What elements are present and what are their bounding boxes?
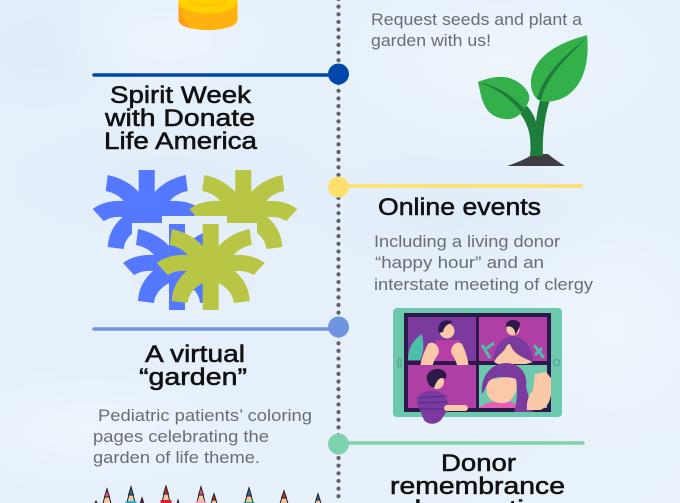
- video tile: top right: [479, 317, 547, 364]
- timeline marker: mint: [328, 434, 583, 454]
- text: virtual garden description: pages celebrating the: [93, 428, 269, 446]
- illustration: video call on tablet: [393, 308, 562, 424]
- icon: four palm shapes: [93, 170, 297, 310]
- timeline marker: periwinkle: [94, 316, 349, 338]
- text: virtual garden description: garden of life theme.: [93, 449, 260, 467]
- heading: Spirit Week with Donate Life America: Spirit Week: [110, 82, 252, 109]
- heading: Donor remembrance observation: [390, 450, 565, 503]
- heading: Online events: Online events: [378, 194, 541, 221]
- text: online events description: [374, 233, 594, 294]
- video tile: bottom right: [479, 363, 551, 412]
- heading: A virtual garden: “garden”: [139, 364, 247, 391]
- text: online events description: “happy hour” and an: [375, 254, 544, 272]
- heading: Donor remembrance observation: Donor: [441, 450, 516, 477]
- icon: gold coin stack: [178, 0, 238, 30]
- text: virtual garden description: Pediatric patients’ coloring: [98, 407, 312, 425]
- text: seed request: [371, 11, 583, 50]
- heading: Donor remembrance observation: remembrance: [390, 473, 565, 500]
- text: seed request: Request seeds and plant a: [371, 11, 583, 29]
- heading: A virtual garden: [139, 341, 247, 391]
- heading: Spirit Week with Donate Life America: with Donate: [104, 105, 255, 132]
- video tile: top left: [408, 317, 476, 369]
- icon: green sprout: [478, 35, 588, 166]
- timeline: dotted spine: [336, 0, 341, 503]
- illustration: colored pencils: [91, 486, 323, 503]
- heading: Spirit Week with Donate Life America: [104, 82, 257, 155]
- heading: Spirit Week with Donate Life America: Life America: [104, 128, 257, 155]
- heading: A virtual garden: A virtual: [145, 341, 245, 368]
- text: online events description: Including a living donor: [374, 233, 561, 251]
- video tile: bottom left: [408, 365, 476, 424]
- text: virtual garden description: [93, 407, 312, 467]
- timeline marker: yellow: [328, 176, 581, 198]
- text: seed request: garden with us!: [371, 32, 491, 50]
- text: online events description: interstate meeting of clergy: [374, 276, 594, 294]
- timeline marker: navy: [94, 64, 349, 84]
